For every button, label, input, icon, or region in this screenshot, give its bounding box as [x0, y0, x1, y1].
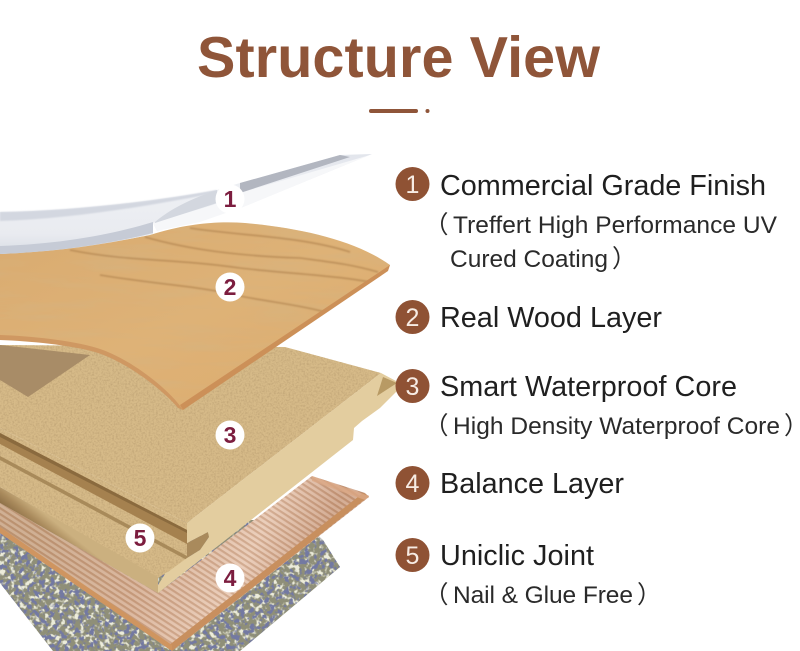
legend item 5: Nail & Glue Free: [453, 582, 633, 609]
legend item 4: 4: [406, 470, 420, 498]
layer illustration: [0, 154, 398, 651]
layer 1: commercial grade finish: [0, 154, 372, 254]
badge 4 on layer: [216, 564, 244, 592]
legend item 1: Commercial Grade Finish: [440, 170, 766, 202]
badge 3 on layer: [216, 420, 244, 450]
badge 4 on layer: 4: [224, 565, 237, 591]
legend item 1: （: [424, 211, 448, 239]
badge 1 on layer: 1: [224, 186, 237, 212]
badge 3 on layer: 3: [224, 422, 236, 448]
legend item 3: 3: [406, 373, 419, 401]
legend item 1: Treffert High Performance UV: [453, 212, 778, 239]
legend item 3: （: [424, 412, 448, 440]
badge 5 on layer: 5: [134, 525, 147, 551]
legend item 1: ）: [612, 245, 636, 273]
legend item 1: [396, 167, 778, 273]
layer 3: waterproof core: [0, 340, 398, 593]
legend item 5: （: [424, 581, 448, 609]
badge 2 on layer: 2: [224, 274, 236, 300]
legend item 1: Cured Coating: [450, 246, 608, 273]
legend item 1: 1: [406, 171, 419, 199]
badge 1 on layer: [216, 184, 244, 214]
badge 5 on layer: [126, 524, 154, 552]
legend item 2: Real Wood Layer: [440, 302, 662, 334]
title underline with dot: [369, 109, 430, 113]
legend item 5: [396, 538, 662, 609]
layer 2: real wood layer: [0, 220, 392, 415]
layer 5: cork underlay: [0, 520, 345, 651]
legend item 2: 2: [406, 304, 419, 332]
title: Structure View: [197, 26, 600, 90]
legend item 3: High Density Waterproof Core: [453, 413, 780, 440]
legend item 3: Smart Waterproof Core: [440, 371, 737, 403]
legend item 4: Balance Layer: [440, 468, 624, 500]
legend item 5: 5: [406, 542, 419, 570]
legend item 3: [396, 369, 800, 440]
badge 2 on layer: [216, 272, 244, 302]
layer 4: balance layer: [0, 470, 372, 651]
legend item 5: ）: [637, 581, 662, 609]
legend item 5: Uniclic Joint: [440, 540, 594, 572]
